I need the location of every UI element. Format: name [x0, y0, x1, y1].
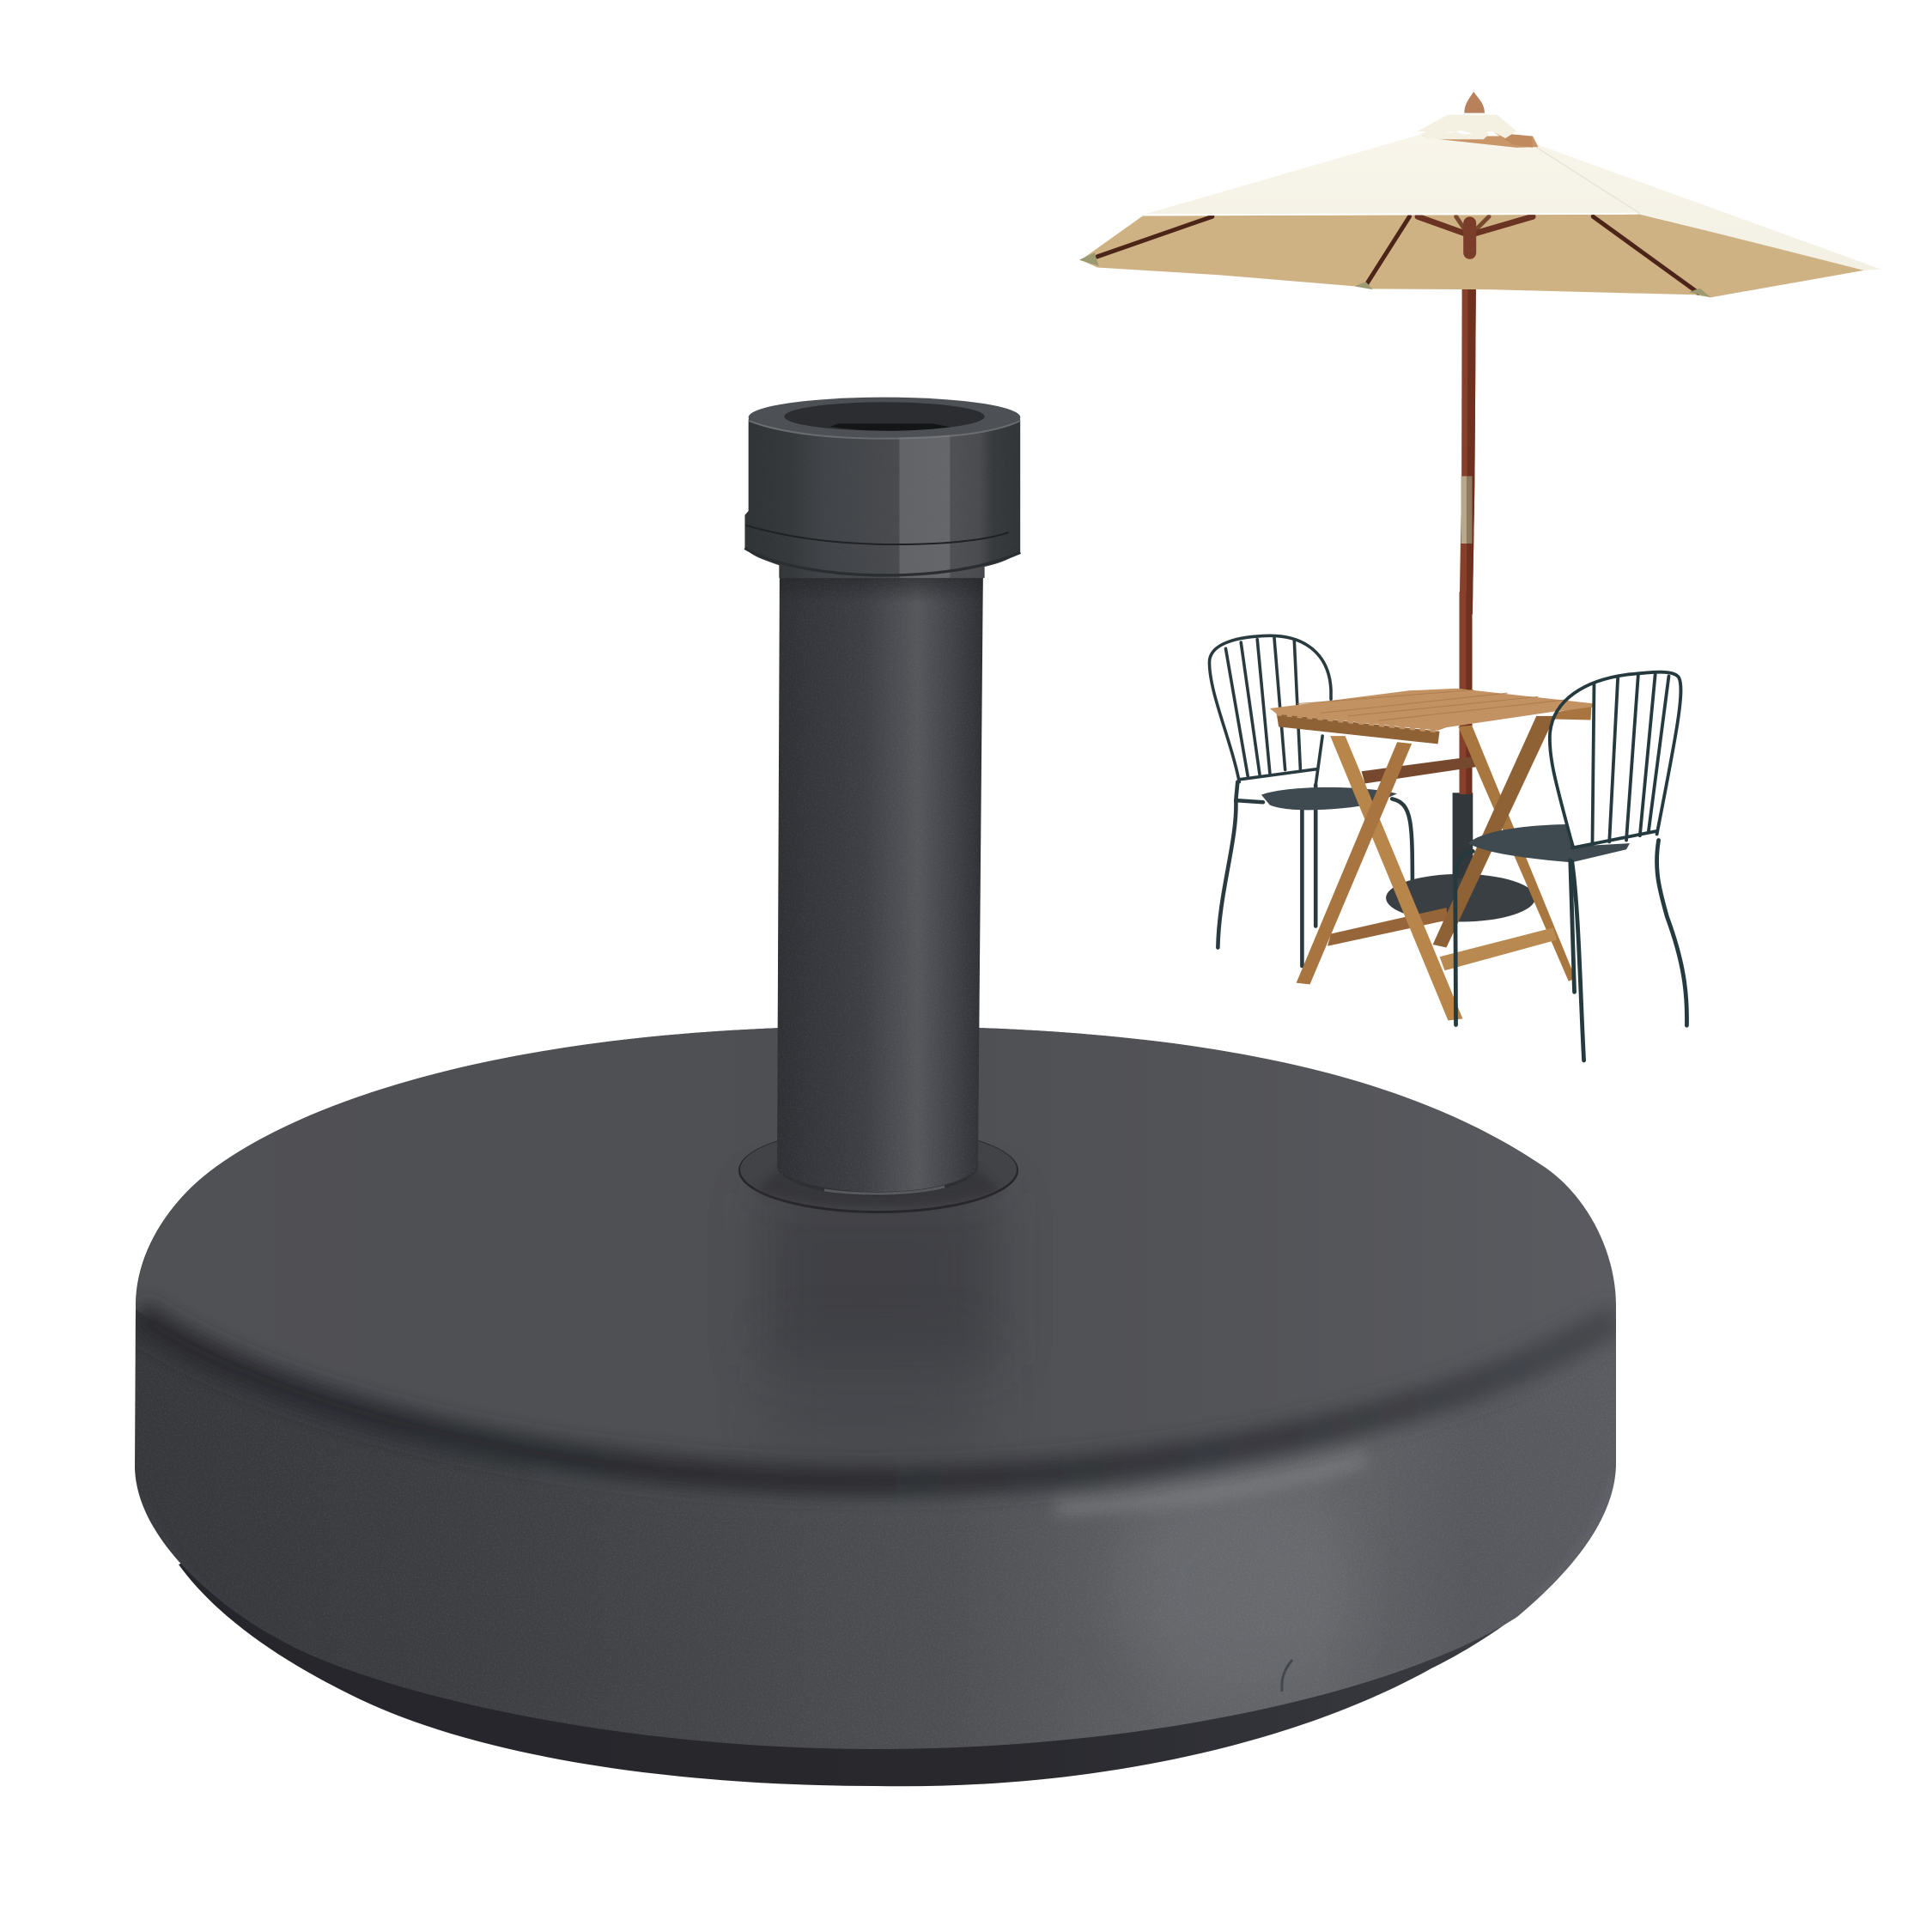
folding table: [1270, 689, 1595, 1021]
umbrella crown and finial: [1418, 92, 1538, 148]
left chair seat: [1261, 787, 1397, 810]
table top: [1270, 689, 1595, 731]
right chair legs: [1455, 841, 1686, 1060]
right chair: [1455, 672, 1686, 1060]
table slats: [1297, 690, 1565, 720]
cap top rim: [749, 398, 1020, 437]
cap lower flange edge: [744, 548, 1020, 575]
bistro set: [1209, 592, 1686, 1060]
base front edge shadow: [137, 1314, 1616, 1481]
base top surface: [136, 1026, 1616, 1479]
right chair backrest: [1550, 672, 1681, 848]
cap opening: [784, 402, 985, 431]
base edge highlight: [532, 1459, 1365, 1511]
table aprons: [1277, 707, 1591, 744]
left chair legs: [1218, 782, 1413, 966]
left chair backrest: [1209, 635, 1331, 785]
base side wall: [129, 1022, 1623, 1760]
base under table: [1386, 592, 1535, 922]
table rear crossbars: [1327, 756, 1478, 946]
umbrella: [1079, 92, 1880, 614]
right chair seat: [1468, 824, 1630, 862]
stem cap: [741, 395, 1028, 581]
umbrella pole: [1460, 227, 1476, 614]
table front crossbar: [1440, 927, 1557, 970]
canopy underside: [1081, 215, 1867, 297]
canopy ribs: [1097, 216, 1698, 293]
table rear legs: [1433, 716, 1576, 981]
cap body: [744, 419, 1020, 579]
base bottom band: [179, 1460, 1524, 1786]
table front legs: [1297, 736, 1462, 1021]
parasol base stem: [773, 558, 987, 1211]
stem shadow on top surface: [756, 1202, 1005, 1412]
cap seam: [745, 526, 1009, 544]
parasol base disc: [129, 1022, 1623, 1786]
left chair: [1209, 635, 1413, 966]
canopy tips: [1079, 252, 1710, 297]
full scene: [135, 91, 1880, 1786]
canopy top fabric: [1141, 135, 1880, 270]
base collar ring: [738, 1127, 1018, 1213]
